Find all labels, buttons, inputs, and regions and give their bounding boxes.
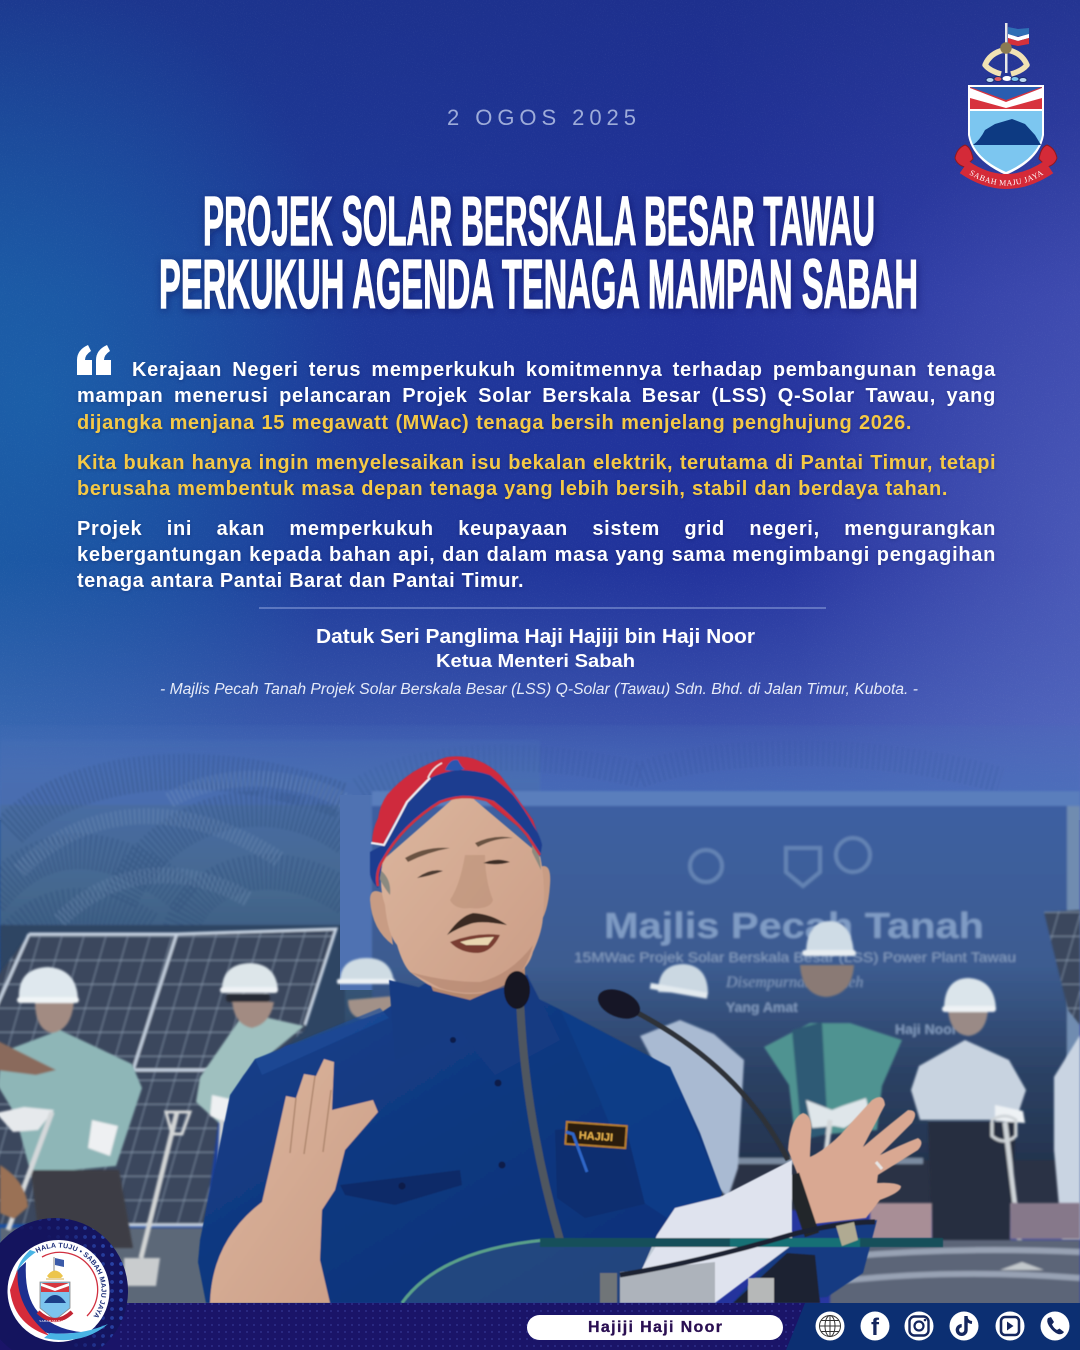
signature divider [259, 607, 826, 609]
ribbon with motto: SABAH MAJU JAYA [970, 170, 1044, 186]
small right panel [1044, 910, 1080, 1025]
text: tenaga antara Pantai Barat dan Pantai Timur. [77, 570, 524, 592]
shirt pocket left [340, 1170, 462, 1205]
quote paragraph two [77, 452, 996, 500]
title [159, 182, 918, 323]
text: dijangka menjana 15 megawatt (MWac) tenaga bersih menjelang penghujung 2026. [77, 412, 912, 434]
right sleeve shadow [561, 1010, 722, 1240]
icon: facebook [860, 1312, 890, 1341]
worker A [640, 964, 744, 1198]
crest beads [986, 76, 1027, 82]
date: 2 OGOS 2025 [447, 105, 636, 130]
worker B [764, 921, 902, 1170]
icon: phone [1040, 1312, 1070, 1340]
papers [620, 1160, 792, 1303]
collar [389, 975, 560, 1075]
cap crown [372, 756, 542, 846]
text: Kerajaan Negeri terus memperkukuh komitmennya terhadap pembangunan tenaga [132, 359, 996, 381]
name pill: Hajiji Haji Noor [588, 1319, 722, 1336]
worker 1 [0, 967, 142, 1248]
microphone left [504, 971, 560, 1240]
text: Projek ini akan memperkukuh keupayaan sistem grid negeri, mengurangkan [77, 518, 996, 540]
banner text: Majlis Pecah Tanah [604, 905, 984, 946]
worker 3 [337, 958, 395, 1020]
icon: youtube [996, 1312, 1024, 1340]
banner: 15MWac Projek Solar Berskala Besar (LSS) Power Plant Tawau [574, 949, 1016, 965]
quote paragraph one [77, 359, 996, 434]
moustache [447, 913, 507, 935]
shoulder strap [255, 1008, 389, 1075]
ground [830, 1203, 1080, 1305]
eyes [417, 870, 443, 878]
mouth [450, 934, 500, 953]
solar panels [0, 929, 336, 1308]
text: kebergantungan kepada bahan api, dan dalam masa yang sama mengimbangi pengagihan [77, 544, 996, 566]
main figure: speaker [198, 756, 943, 1303]
small crest: SABAH MAJU JAYA [39, 1319, 71, 1323]
pale wall behind [340, 795, 373, 990]
text: Kita bukan hanya ingin menyelesaikan isu bekalan elektrik, terutama di Pantai Timur, tetapi [77, 452, 996, 474]
woman right [1054, 1035, 1080, 1240]
cap visor [370, 770, 542, 888]
name badge: HAJIJI [578, 1130, 613, 1144]
small crest [38, 1257, 72, 1323]
name badge [565, 1122, 627, 1172]
shirt [198, 980, 722, 1303]
background photo: groundbreaking ceremony [0, 725, 1080, 1308]
left forearm and hand [210, 1059, 378, 1303]
footer bar [0, 1303, 1080, 1350]
footer right panel [786, 1303, 1080, 1350]
speaker role: Ketua Menteri Sabah [436, 650, 635, 671]
arms holding flag [985, 45, 1027, 74]
neck [420, 955, 525, 1060]
brows [405, 848, 450, 862]
swooshes [15, 1262, 104, 1334]
shirt pocket right [555, 1124, 645, 1218]
ears [370, 866, 550, 945]
icon: instagram [904, 1312, 934, 1340]
ribbon with motto [954, 144, 1058, 189]
shovel [124, 1112, 222, 1286]
worker C [911, 978, 1026, 1262]
text: berusaha membentuk masa depan tenaga yang lebih bersih, stabil dan berdaya tahan. [77, 478, 948, 500]
event location: - Majlis Pecah Tanah Projek Solar Berskala Besar (LSS) Q-Solar (Tawau) Sdn. Bhd. di Jalan Timur, Kubota. - [160, 681, 918, 698]
palm trees [0, 725, 1080, 1045]
icon: opening quote mark [77, 345, 111, 375]
workers right [640, 910, 1080, 1262]
icon: website [816, 1312, 844, 1340]
banner logos [690, 838, 870, 886]
bottom left Hala Tuju logo [0, 1218, 128, 1350]
workers left [0, 958, 395, 1286]
right sleeve lower [733, 1220, 877, 1303]
Sabah state crest [954, 23, 1058, 189]
ring text: HALA TUJU • SABAH MAJU JAYA [35, 1242, 106, 1318]
podium lower parts [620, 1262, 715, 1303]
worker 2 [196, 963, 304, 1124]
shield [968, 85, 1044, 175]
banner: Disempurnakan Oleh [725, 974, 863, 991]
cap [370, 756, 542, 888]
banner: Yang Amat [726, 999, 798, 1015]
text: mampan menerusi pelancaran Projek Solar Berskala Besar (LSS) Q-Solar Tawau, yang [77, 385, 996, 407]
name pill [527, 1315, 783, 1340]
speaker name: Datuk Seri Panglima Haji Hajiji bin Haji Noor [316, 626, 755, 648]
banner [372, 791, 1080, 1210]
quote paragraph three [77, 518, 996, 592]
microphone right [594, 984, 812, 1235]
icon: facebook: f [871, 1314, 880, 1341]
icon: tiktok [950, 1312, 978, 1340]
glass podium [402, 1222, 943, 1303]
nose [450, 855, 493, 908]
face [370, 790, 550, 994]
flag [1005, 23, 1029, 73]
banner: Haji Noor [895, 1021, 958, 1037]
right hand [788, 1097, 922, 1224]
